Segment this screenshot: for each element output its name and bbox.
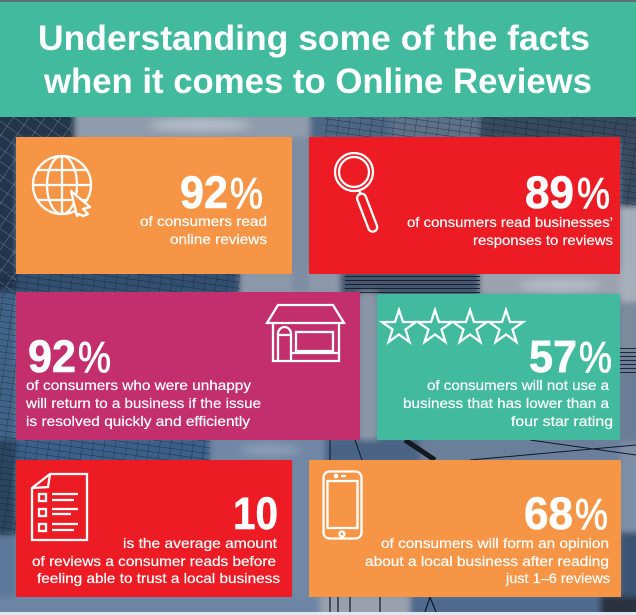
icon: four outlined stars: [382, 310, 523, 342]
panel: 10 reviews before trust: [16, 460, 292, 597]
icon: smartphone: [324, 472, 362, 538]
statistic: 89%: [525, 167, 610, 218]
statistic: 92%: [28, 331, 111, 382]
description: is resolved quickly and efficiently: [26, 413, 250, 429]
description: [407, 214, 613, 248]
statistic: 92%: [180, 167, 263, 218]
description: [25, 377, 261, 429]
icon: globe with cursor: [33, 156, 91, 216]
statistic: 92%: 92: [180, 167, 228, 218]
icon: shop front: [267, 305, 344, 361]
description: four star rating: [511, 413, 613, 429]
panel: 92% return if resolved: [16, 292, 360, 440]
description: of consumers will form an opinion: [381, 535, 609, 551]
statistic: 89%: %: [577, 169, 610, 218]
statistic: 92%: %: [230, 169, 263, 218]
description: responses to reviews: [473, 232, 613, 248]
description: of reviews a consumer reads before: [32, 553, 276, 569]
description: of consumers read: [140, 213, 267, 229]
title banner: [0, 2, 636, 117]
icon: magnifying glass: [335, 153, 379, 233]
panel: 89% read responses: [309, 137, 620, 274]
description: of consumers who were unhappy: [26, 377, 251, 393]
panel: 92% read online reviews: [16, 137, 292, 274]
statistic: 68%: [524, 488, 608, 539]
description: [365, 535, 610, 586]
description: online reviews: [170, 231, 267, 247]
panel: 68% form an opinion: [309, 460, 621, 597]
statistic: 57%: %: [579, 333, 612, 382]
description: [403, 377, 613, 429]
description: feeling able to trust a local business: [37, 570, 280, 586]
statistic: 10: 10: [233, 488, 278, 539]
description: business that has lower than a: [403, 395, 609, 411]
description: is the average amount: [123, 535, 277, 551]
description: about a local business after reading: [365, 553, 609, 569]
statistic: 68%: 68: [524, 488, 573, 539]
statistic: 57%: [529, 331, 612, 382]
description: [32, 535, 280, 586]
description: [140, 213, 267, 247]
statistic: 68%: %: [575, 490, 608, 539]
panel: 57% four star rating: [377, 294, 620, 440]
statistic: 92%: 92: [28, 331, 76, 382]
title text: when it comes to Online Reviews: [43, 62, 592, 101]
description: just 1–6 reviews: [505, 570, 610, 586]
description: will return to a business if the issue: [25, 395, 261, 411]
title text: [38, 19, 592, 101]
statistic: 92%: %: [78, 333, 111, 382]
statistic: 57%: 57: [529, 331, 577, 382]
description: of consumers read businesses’: [407, 214, 613, 230]
title text: Understanding some of the facts: [38, 19, 590, 58]
icon: checklist document: [32, 474, 87, 540]
statistic: 89%: 89: [525, 167, 574, 218]
description: of consumers will not use a: [427, 377, 609, 393]
